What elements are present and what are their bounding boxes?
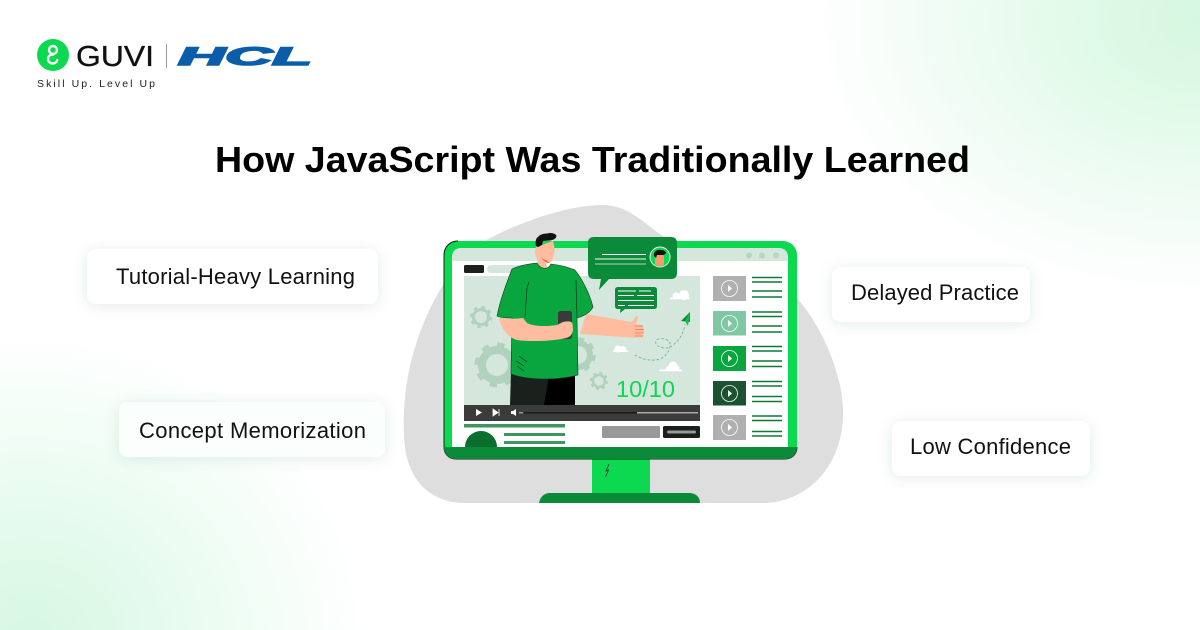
- bottom bezel: [444, 447, 797, 459]
- phone: [558, 311, 572, 339]
- small speech bubble: [615, 287, 657, 313]
- HCL wordmark: HCL: [178, 43, 312, 71]
- thumbnail 2: [713, 311, 782, 336]
- icon: GUVI circle: [37, 39, 69, 71]
- GUVI wordmark: GUVI: [76, 41, 154, 73]
- monitor illustration: [444, 233, 797, 503]
- hair: [536, 233, 556, 247]
- card: Tutorial-Heavy Learning: [87, 249, 378, 304]
- shirt folds: [516, 280, 577, 371]
- paper plane: [681, 312, 690, 326]
- card: Tutorial-Heavy Learning: Tutorial-Heavy Learning: [116, 264, 355, 289]
- logo: GUVI HCL: [37, 39, 312, 90]
- logo divider: [166, 44, 167, 68]
- tagline: Skill Up. Level Up: [37, 78, 155, 90]
- monitor base: [539, 493, 700, 503]
- thumbnail 4: [713, 381, 782, 406]
- score: 10/10: [616, 376, 675, 402]
- address bar pills: [464, 265, 527, 273]
- screen top band: [452, 248, 788, 261]
- screen: [452, 248, 788, 447]
- monitor frame: [444, 241, 797, 459]
- card: Low Confidence: [892, 421, 1090, 476]
- card: Low Confidence: Low Confidence: [910, 434, 1071, 459]
- thumb fingers: [635, 326, 644, 336]
- paper plane trail: [635, 324, 685, 360]
- thumbnail 1: [713, 276, 782, 301]
- window dots: [746, 252, 779, 258]
- card: Concept Memorization: Concept Memorization: [139, 418, 366, 443]
- thumbnail 5: [713, 415, 782, 440]
- frame outline: [444, 241, 797, 459]
- card: Delayed Practice: [832, 267, 1030, 322]
- stand glint: [606, 464, 609, 477]
- trousers: [510, 372, 575, 405]
- thumbnail 3: [713, 346, 782, 371]
- gears: [471, 307, 607, 389]
- video thumbnails list: [713, 276, 782, 440]
- monitor stand: [592, 459, 650, 493]
- neck and face: [535, 241, 555, 270]
- bent arm: [499, 318, 573, 341]
- extended arm: [580, 314, 644, 338]
- video controls: [464, 405, 700, 421]
- card: Concept Memorization: [119, 402, 385, 457]
- title: How JavaScript Was Traditionally Learned: [215, 139, 970, 180]
- blob background: [404, 205, 843, 503]
- mouth and jaw shadow: [541, 257, 550, 263]
- clouds: [613, 290, 690, 372]
- video panel: [464, 276, 700, 405]
- shirt: [497, 263, 593, 379]
- large speech bubble: [588, 237, 677, 290]
- presenter figure: [497, 233, 644, 405]
- avatar: [650, 247, 670, 268]
- video description: [464, 424, 700, 447]
- card: Delayed Practice: Delayed Practice: [851, 280, 1019, 305]
